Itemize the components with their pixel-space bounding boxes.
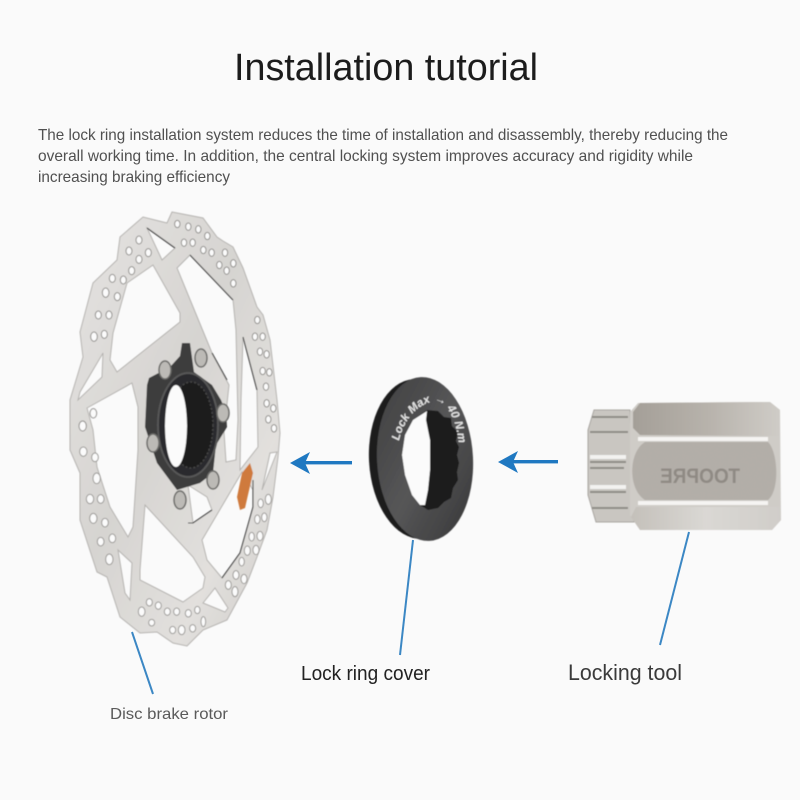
intro text block: The lock ring installation system reduces the time of installation and disassembly, thereby reducing the bbox=[38, 127, 728, 144]
intro text block: increasing braking efficiency bbox=[38, 169, 230, 186]
intro text block bbox=[38, 127, 728, 186]
arrow: toward rotor bbox=[290, 452, 352, 474]
tool middle facet bbox=[632, 442, 776, 500]
ring outer lip bbox=[365, 377, 471, 541]
tool highlights bbox=[638, 439, 768, 503]
tool spline head bbox=[588, 410, 634, 522]
ring bore opening bbox=[402, 411, 430, 505]
locking tool bbox=[588, 402, 781, 530]
leader lines bbox=[132, 532, 689, 694]
tool bottom facet bbox=[631, 507, 781, 530]
label: disc brake rotor: Disc brake rotor bbox=[110, 706, 229, 723]
lock ring cover bbox=[368, 376, 474, 542]
title: Installation tutorial bbox=[234, 47, 538, 89]
label: locking tool: Locking tool bbox=[568, 660, 682, 685]
disc brake rotor bbox=[70, 212, 280, 646]
tool body bbox=[630, 402, 781, 530]
intro text block: overall working time. In addition, the central locking system improves accuracy and rigidity while bbox=[38, 148, 693, 165]
arrow: toward lock ring bbox=[498, 451, 558, 473]
rotor holes lower bbox=[80, 447, 271, 635]
rotor disc bbox=[70, 212, 280, 646]
ring inner wall bbox=[402, 410, 459, 510]
tool brand mark: TOOPRE bbox=[660, 465, 740, 488]
rotor holes upper bbox=[79, 220, 277, 432]
mounting bolts bbox=[147, 349, 229, 509]
orange sticker bbox=[237, 463, 253, 510]
rotor slot edges bbox=[147, 228, 257, 578]
tool top facet bbox=[633, 402, 780, 436]
spline grooves bbox=[590, 457, 626, 487]
label: lock ring cover: Lock ring cover bbox=[301, 663, 430, 685]
hub bore opening bbox=[165, 385, 187, 467]
ring engraving: Lock Max → 40 N.m bbox=[391, 396, 466, 443]
hub ring bbox=[158, 373, 218, 477]
ring face bbox=[373, 375, 477, 543]
hub splined bore bbox=[169, 382, 213, 468]
central hub carrier bbox=[145, 343, 227, 490]
